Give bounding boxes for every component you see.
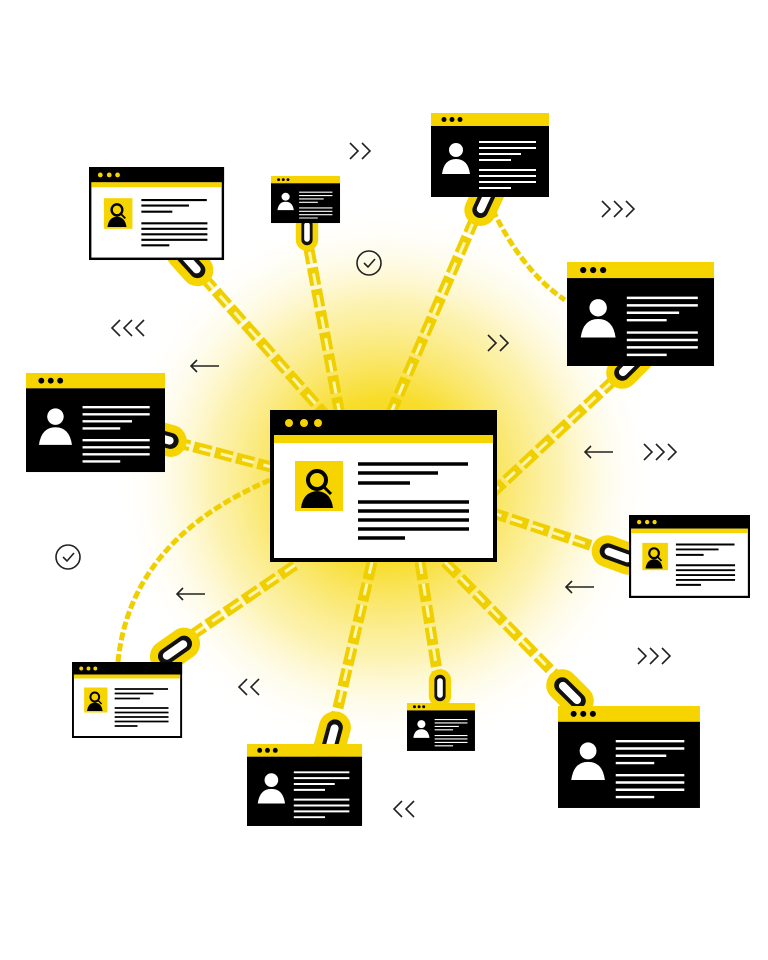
window: bottom [247,744,362,826]
central window [270,410,497,560]
decorative arrows and checks [56,143,676,817]
big chain links [135,174,655,763]
window: top [431,113,549,197]
window: left [26,373,165,472]
window: right upper [567,262,714,366]
window: bottom right [558,706,700,808]
window: right middle [629,515,750,597]
window: bottom small [407,703,475,751]
window: bottom-left [72,662,182,737]
chains [118,195,630,742]
window: top-left [89,167,224,259]
window: small top [271,176,340,223]
background glow [115,205,655,755]
